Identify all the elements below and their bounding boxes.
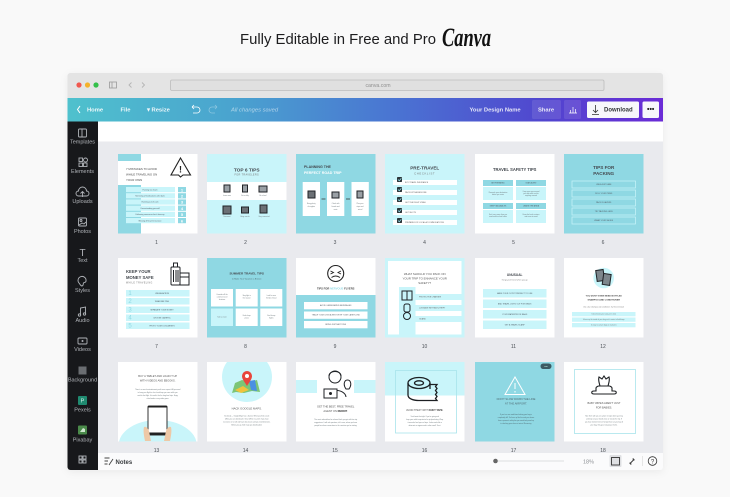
sidebar item: templates: Templates [70, 140, 95, 146]
card 16: duct tape: keep your wallet unprotected or pickpocketing. Wrap [406, 418, 443, 421]
card 18: baby wipes: you have stickies from on foreign those an you buy all [585, 420, 624, 424]
card 10: what to pack: YOUR TRIP TO ENHANCE YOUR [403, 276, 447, 280]
card 3: road trip: friends and [332, 206, 340, 208]
card 12: bottled shampoo: YOU DON'T EVEN NEED BOTTLED [586, 296, 622, 298]
card 10: what to pack: SAFETY? [418, 281, 432, 285]
card 18: baby wipes: your bag, they go a long way at home. [590, 424, 618, 426]
title: Canva [442, 23, 491, 52]
card 18: baby wipes: Take them with you on a plane to wipe down your tray [585, 414, 623, 418]
card 1: seven mistakes: Not being of medications after dark [135, 194, 165, 198]
card 1: seven mistakes: Running out of cash [142, 201, 158, 204]
card 11: unusual: AND TRAVEL LIGHT, OUT FOR BINDS [498, 302, 532, 306]
card 3: road trip: stops and [357, 205, 364, 208]
card 5: safety tips: Research your destination [489, 191, 507, 194]
card 8: summer tips: Take a cruise [217, 316, 227, 318]
card 8: summer tips [207, 258, 286, 338]
card 17 number: 17 [511, 448, 516, 454]
card 10: what to pack: GUARD [419, 318, 426, 321]
card 6 number: 6 [602, 240, 605, 246]
card 8: summer tips: Look for new [267, 295, 277, 297]
card 5: safety tips: before you arrive [492, 194, 504, 196]
browser window [68, 73, 663, 470]
card 12: bottled shampoo: It also means your carry-on is neat [591, 313, 616, 316]
card 8: summer tips: friends of local [266, 298, 277, 300]
card 6: packing tips: USE A SUITCASE [596, 183, 612, 186]
card 9: nervous flyers [296, 258, 376, 338]
card 2: top six tips: Stay connected [258, 215, 270, 218]
card 9 number: 9 [334, 344, 337, 350]
editor toolbar: Share [538, 108, 555, 114]
card 17: airport: completely full. Tie them up like this and your shoes [498, 416, 534, 419]
sidebar item: text: T [79, 248, 86, 259]
card 2: top six tips: Bring snacks [240, 216, 250, 218]
sidebar item: background: Background [68, 378, 97, 384]
card 7 number: 7 [155, 344, 158, 350]
card 12: bottled shampoo: It frees up the inside of your bag so it's easier to find things [583, 318, 625, 321]
editor toolbar: Home [87, 108, 104, 114]
card 8: summer tips: to Make Your Vacation a Breeze [232, 278, 262, 280]
card 3: road trip: PLANNING THE [304, 165, 332, 169]
icon: tape roll [408, 378, 437, 400]
card 17: airport [475, 362, 554, 442]
card 7: money safe [118, 258, 198, 338]
card 15 number: 15 [332, 448, 338, 454]
card 1: seven mistakes: 6 [181, 218, 184, 223]
editor toolbar: ▾ Resize [146, 108, 171, 114]
card 12: bottled shampoo [564, 258, 644, 338]
card 13: tablet: wait for the flight. It's worth it for the long-haul trips. Enjoy [138, 394, 178, 397]
card 8: summer tips: Consider off the [216, 293, 228, 296]
card 13: tablet: There's so much entertainment you'd never expect. All you need [135, 388, 180, 391]
card 8: summer tips: locations [219, 298, 225, 301]
browser title bar [68, 73, 663, 98]
sidebar item: styles [75, 276, 90, 294]
card 5: safety tips [475, 154, 554, 234]
card 7: money safe: SEPARATE YOUR MONEY [150, 308, 174, 312]
notes bar: 18% [583, 460, 594, 466]
sidebar item: audio: Audio [75, 318, 90, 324]
card 1: seven mistakes: Following someone else's itinerary [136, 213, 164, 216]
card 7: money safe: MONEY SAFE [126, 275, 154, 280]
card 5: safety tips: STAY ALERT [525, 182, 537, 185]
title [240, 23, 491, 52]
sidebar item: uploads: Uploads [72, 199, 93, 205]
card 9: nervous flyers: AVOID CAFFEINATED BEVERAGES [320, 304, 352, 307]
card 5: safety tips: LEARN THE AREA [523, 205, 540, 208]
card 9: nervous flyers: BRING DISTRACTIONS [325, 323, 347, 326]
card 10: what to pack: LUGGAGE WITH ANTI-THEFT [419, 307, 446, 310]
card 17: airport: to checking your shoes at arrival. Reserving. [500, 422, 532, 425]
card 8: summer tips: prices [245, 318, 249, 320]
card 14: google maps: no service or no wifi and have data issues and you need directions. [223, 420, 271, 424]
card 4: checklist: PREPARE FOR LOCAL ACCOMMODATIONS [405, 221, 445, 224]
card 18: baby wipes: BABY WIPES AREN'T JUST [588, 401, 621, 405]
card 9: nervous flyers: TEACH YOUR LEGS A REST WITH YOUR CARRY-ONS [312, 314, 360, 317]
card 6: packing tips: WEAR YOUR SHOES [594, 219, 614, 222]
card 8: summer tips: SUMMER TRAVEL TIPS [229, 272, 264, 276]
card 10 number: 10 [422, 344, 427, 350]
card 7: money safe: 1 [128, 291, 132, 297]
icon: nervous face [328, 266, 344, 282]
icon: wipes pack [592, 376, 616, 394]
card 6: packing tips: PACKING [593, 171, 615, 176]
icon: notes [104, 458, 113, 465]
card 2: top six tips: Be a local [260, 195, 267, 197]
card 13: tablet: to keep your flight in check and keep you sane while you [138, 391, 178, 394]
card 11: unusual: GET A TRAVEL SCARF [505, 324, 526, 326]
card 9: nervous flyers: TIPS FOR NERVOUS FLYERS [317, 286, 355, 290]
card 6: packing tips: PACK IN LAYERS [596, 201, 612, 204]
sidebar item: photos: Photos [74, 229, 91, 235]
card 13: tablet: WITH VIDEOS AND EBOOKS. [140, 378, 176, 382]
card 5: safety tips: KEEP VALUABLES [490, 205, 507, 208]
card 5 number: 5 [512, 240, 515, 246]
card 10: what to pack [385, 258, 464, 338]
editor toolbar: Download [604, 108, 633, 114]
card 11: unusual: YOUR WATERPROOF BAGS [502, 313, 528, 316]
card 5: safety tips: BE PREPARED [491, 182, 505, 185]
card 16: duct tape: deterrent on zippers and in other small. Trust. [409, 424, 441, 427]
icon: map with pin [232, 371, 260, 393]
card 4: checklist: PACK EXTRA MEDICINE [405, 191, 427, 194]
sidebar item: videos [74, 338, 91, 353]
icon: agent with laptop [324, 371, 351, 398]
card 14: google maps: offline you can download it. Great offline in a pinch if you have [225, 418, 269, 420]
card 7: money safe: PHOTO YOUR DOCUMENTS [149, 326, 175, 328]
card 4: checklist: BUY TRAVEL INSURANCE [405, 181, 429, 184]
card 16: duct tape [385, 362, 464, 442]
card 1: seven mistakes: 1 [181, 187, 184, 192]
card 2: top six tips: Set a daily [241, 194, 249, 197]
card 13 number: 13 [154, 448, 159, 454]
sidebar [68, 122, 98, 470]
editor toolbar [68, 98, 663, 122]
card 14: google maps: HACK GOOGLE MAPS. [232, 406, 262, 410]
card 13: tablet: a few books or any video game. [146, 398, 170, 400]
card 18: baby wipes: and keep on your hands clean or sneaks the trip. If [586, 418, 622, 420]
card 7: money safe: 2 [128, 299, 132, 305]
card 2: top six tips: FOR TRAVELERS [234, 174, 259, 177]
card 1: seven mistakes: Overextending yourself [140, 207, 160, 210]
card 8 number: 8 [244, 344, 247, 350]
sidebar item: styles: Styles [75, 288, 90, 294]
card 1: seven mistakes: YOUR OWN [126, 178, 142, 182]
card 5: safety tips: anything unusual [525, 194, 538, 197]
card 1: seven mistakes: Packing too much [142, 188, 158, 191]
icon: bottles [596, 270, 611, 285]
sidebar item: text [77, 248, 88, 264]
card 1: seven mistakes [118, 154, 198, 234]
sidebar item: elements [71, 158, 94, 175]
expand icon [630, 459, 634, 464]
card 16: duct tape: AVOID THEFT WITH DUCT TAPE. [406, 409, 444, 412]
help icon: ? [651, 460, 655, 466]
card 2: top six tips: Learn more [223, 195, 231, 197]
card 4: checklist [385, 154, 464, 234]
card 11: unusual [475, 258, 554, 338]
icon: warning triangle [505, 377, 525, 394]
notes bar [98, 453, 663, 470]
card 17: airport: If you're a new road-friend asking your bag is [500, 414, 532, 416]
card 6: packing tips [564, 154, 644, 234]
card 7: money safe: 4 [128, 316, 132, 322]
card 11: unusual: UNUSUAL [507, 273, 523, 277]
card 11: unusual: MAKE YOUR OUTFIT PERFECT TO USE [497, 292, 533, 295]
card 8: summer tips: Find cheap [267, 315, 275, 317]
browser title bar: canva.com [365, 83, 391, 89]
card 15: travel agent: The most underutilized or unheard hack you get with free trip [314, 418, 357, 421]
card 5: safety tips: Don't carry more than you [489, 213, 507, 216]
sidebar item: text: Text [77, 258, 88, 264]
card 1: seven mistakes: 2 [181, 194, 184, 198]
card 18: baby wipes: FOR BABIES. [596, 406, 612, 410]
card 7: money safe: 5 [128, 324, 132, 330]
card 17: airport: DON'T SLOW DOWN THE LINE [497, 397, 536, 401]
sidebar item: pexels: P [81, 398, 85, 404]
card 1: seven mistakes: 3 [181, 200, 184, 205]
editor toolbar: Your Design Name [470, 108, 521, 114]
card 16 number: 16 [422, 448, 427, 454]
card 10: what to pack: WHAT SHOULD YOU PACK ON [404, 272, 446, 276]
card 3: road trip: Check with [332, 202, 340, 205]
card 8: summer tips: the season [243, 296, 251, 300]
card 15: travel agent: suggestions. It will ask questions, tell a user, where you have [314, 421, 357, 424]
card 11: unusual: things you'll need when you go [502, 278, 528, 282]
card 2 number: 2 [244, 240, 247, 246]
card 12: bottled shampoo: SHAMPOO AND CONDITIONER [587, 298, 620, 302]
sidebar item: templates [70, 129, 95, 146]
card 3: road trip: PERFECT ROAD TRIP [304, 171, 342, 175]
card 6: packing tips: TRY PACKING LESS [595, 210, 613, 213]
card 8: summer tips: Stay light in [243, 294, 251, 297]
card 15: travel agent: people here from connections in the countries you're visiting. [314, 424, 358, 427]
card 5: safety tips: Keep your eyes around [523, 191, 539, 193]
card 13: tablet [118, 362, 198, 442]
sidebar item: videos: Videos [74, 347, 91, 353]
card 14 number: 14 [243, 448, 248, 454]
badge: ••• [544, 364, 548, 368]
card 8: summer tips: common travel [217, 296, 228, 298]
card 17: airport: AT THE AIRPORT. [505, 402, 527, 406]
sidebar item: elements: Elements [71, 169, 94, 175]
card 6: packing tips: TIPS FOR [593, 165, 615, 170]
card 11 number: 11 [511, 344, 516, 350]
sidebar item: pexels [74, 396, 91, 414]
card 14: google maps [207, 362, 286, 442]
editor toolbar: ••• [647, 106, 655, 114]
card 18: baby wipes [564, 362, 644, 442]
card 3: road trip [296, 154, 376, 234]
card 3 number: 3 [334, 240, 337, 246]
notes bar: Notes [116, 460, 133, 466]
card 1 number: 1 [155, 240, 158, 246]
card 12: bottled shampoo: Use a bar shampoo and conditioner. Try these instead: [583, 306, 625, 308]
card 3: road trip: of supplies [307, 206, 315, 208]
card 3: road trip: arrival [358, 209, 363, 211]
card 3: road trip: Bring plenty [307, 202, 316, 205]
card 12 number: 12 [600, 344, 606, 350]
card 3: road trip: route [334, 208, 338, 211]
card 5: safety tips: Know the local customs [523, 213, 540, 216]
card 5: safety tips: and areas to avoid [524, 215, 538, 218]
card 14: google maps: Before you go, hide maps you downloaded. [231, 424, 263, 426]
zoom slider [493, 459, 564, 463]
card 7: money safe: CHOOSE CAREFUL [153, 316, 171, 320]
card 1: seven mistakes: 5 [181, 212, 184, 217]
card 1: seven mistakes: WHILE TRAVELING ON [126, 172, 157, 176]
card 4 number: 4 [423, 240, 426, 246]
card 15: travel agent: AGENT ON REDDIT. [323, 409, 348, 413]
title: Fully Editable in Free and Pro [240, 32, 436, 48]
sidebar item: audio [75, 307, 90, 324]
help icon [648, 457, 657, 466]
sidebar item: pixabay: Pixabay [73, 438, 93, 444]
card 15: travel agent [296, 362, 376, 442]
sidebar item: uploads [72, 187, 93, 205]
card 1: seven mistakes: ! [179, 164, 182, 174]
icon: tablet and hands [144, 406, 171, 441]
card 8: summer tips: flights [269, 316, 274, 320]
sidebar item: photos [74, 218, 91, 235]
card 7: money safe: USE AN APRON [155, 292, 170, 295]
card 2: top six tips [207, 154, 286, 234]
card 15: travel agent: GET THE BEST, FREE TRAVEL [317, 404, 355, 408]
card 8: summer tips: Find cheap [243, 315, 251, 317]
card 1: seven mistakes: Missing off travel insurance [139, 219, 161, 222]
card 5: safety tips: need and use hotel safes [489, 215, 507, 218]
card 5: safety tips: TRAVEL SAFETY TIPS [493, 167, 537, 172]
card 4: checklist: CHECKLIST [414, 172, 435, 176]
card 7: money safe: 3 [128, 308, 132, 314]
card 4: checklist: PRE-TRAVEL [410, 166, 439, 170]
card 1: seven mistakes: 4 [181, 206, 184, 211]
card 10: what to pack: PROTECTIVE CHARGER [419, 296, 442, 299]
card 17: airport: from a person's safety line you would only need up [498, 419, 534, 422]
editor toolbar: File [120, 108, 131, 114]
card 2: top six tips: TOP 6 TIPS [234, 168, 260, 174]
card 7: money safe: WHILE TRAVELING [126, 282, 153, 284]
card 4: checklist: GET THE RIGHT VISAS [405, 201, 426, 204]
top white strip [98, 122, 663, 142]
sidebar item: pixabay [73, 426, 93, 444]
sidebar item: pexels: Pexels [74, 408, 91, 414]
sidebar item: more apps [79, 456, 86, 463]
card 1: seven mistakes: 7 MISTAKES TO AVOID [126, 167, 157, 171]
card 2: top six tips: Document [223, 215, 231, 218]
card 7: money safe: WEAR BELTING [155, 300, 170, 303]
card 14: google maps: Go ahead — Google Maps has a feature. When you find a route [224, 414, 269, 418]
card 7: money safe: KEEP YOUR [126, 269, 151, 274]
card 3: road trip: Plan your [357, 203, 364, 205]
sidebar item: background [68, 366, 97, 384]
card 16: duct tape: it around a few layers of tape. It also works like a [408, 421, 442, 424]
card 6: packing tips: ROLL YOUR ITEMS [595, 193, 613, 195]
grid view button [610, 455, 622, 467]
card 4: checklist: GET SHOTS [405, 212, 417, 214]
editor toolbar: All changes saved [230, 108, 279, 114]
card 18 number: 18 [600, 448, 606, 454]
card 12: bottled shampoo: Is easy to carry in bags or on planes [591, 324, 617, 327]
card 13: tablet: BUY A TABLET AND LOAD IT UP [138, 374, 177, 378]
card 16: duct tape: You'd want that right. If you're going and [411, 415, 439, 418]
card 5: safety tips: you and watch out for [523, 192, 539, 195]
